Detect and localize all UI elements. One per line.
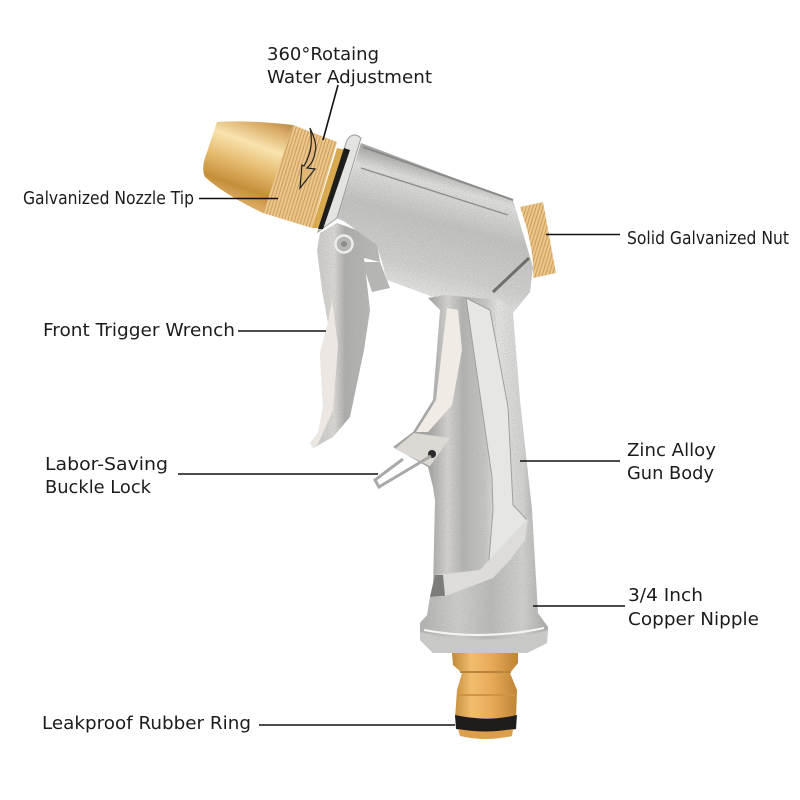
label: labor-saving buckle lock: Labor-Saving bbox=[45, 455, 168, 475]
brass nozzle tip bbox=[203, 121, 293, 214]
leader lines bbox=[178, 85, 625, 725]
label: copper nipple bbox=[628, 586, 759, 630]
gold band bbox=[312, 148, 346, 228]
base skirt and flange bbox=[420, 510, 548, 653]
front collar bbox=[318, 135, 361, 232]
spray gun illustration bbox=[203, 121, 556, 739]
pistol grip bbox=[393, 295, 536, 590]
label: zinc alloy gun body: Gun Body bbox=[627, 464, 714, 484]
brass hose nipple bbox=[452, 653, 518, 739]
label: leakproof rubber ring: Leakproof Rubber Ring bbox=[42, 714, 251, 734]
label: 360 rotating water adjustment: 360°Rotaing bbox=[267, 45, 379, 65]
label: 360 rotating water adjustment bbox=[267, 45, 432, 88]
label: 360 rotating water adjustment: Water Adjustment bbox=[267, 68, 432, 88]
label: copper nipple: 3/4 Inch bbox=[628, 586, 703, 606]
rod behind trigger bbox=[362, 262, 390, 292]
main gun body bbox=[318, 135, 533, 313]
label: copper nipple: Copper Nipple bbox=[628, 610, 759, 630]
buckle lock wire bbox=[375, 456, 431, 487]
trigger lever bbox=[310, 223, 380, 448]
label: zinc alloy gun body: Zinc Alloy bbox=[627, 441, 716, 461]
label: galvanized nozzle tip: Galvanized Nozzle Tip bbox=[23, 189, 194, 209]
label: zinc alloy gun body bbox=[627, 441, 716, 484]
label: labor-saving buckle lock bbox=[45, 455, 168, 498]
knurled adjustment ring bbox=[263, 125, 337, 228]
label: labor-saving buckle lock: Buckle Lock bbox=[45, 478, 152, 498]
rotation arrow bbox=[300, 128, 316, 188]
rubber ring bbox=[455, 715, 517, 732]
label: front trigger wrench: Front Trigger Wrench bbox=[43, 321, 235, 341]
brass rear nut bbox=[520, 202, 556, 278]
